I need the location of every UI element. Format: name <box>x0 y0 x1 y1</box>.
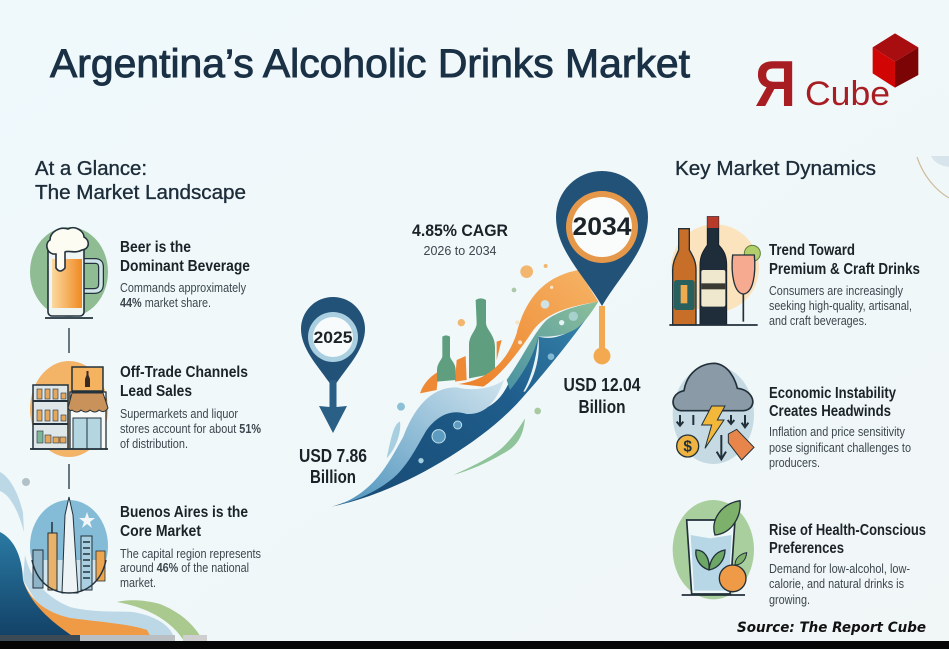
text: off-trade <box>120 364 261 451</box>
title: Argentina’s Alcoholic Drinks Market <box>50 42 690 86</box>
text: off-trade: of distribution. <box>120 437 188 451</box>
pin: 2034: 2034 <box>572 213 632 241</box>
text: off-trade: Off-Trade Channels <box>120 364 248 381</box>
text: buenos aires: Core Market <box>120 523 202 540</box>
text: buenos aires: market. <box>120 576 156 590</box>
icon: beer mug <box>30 227 108 318</box>
dark navy stream <box>332 302 598 507</box>
white highlight <box>523 337 539 392</box>
logo text <box>755 47 890 120</box>
text: off-trade: stores account for about 51% <box>120 422 261 436</box>
text: cagr: 4.85% CAGR <box>412 221 508 240</box>
label: usd 7.86 billion: USD 7.86 <box>299 446 367 466</box>
logo: RCube <box>755 33 918 120</box>
text: buenos aires: around 46% of the national <box>120 561 249 575</box>
pin: 2034 <box>556 171 648 364</box>
decorative arc top right <box>917 156 949 198</box>
text: economic: pose significant challenges to <box>769 441 911 455</box>
text: buenos aires: Buenos Aires is the <box>120 504 248 521</box>
text: health: calorie, and natural drinks is <box>769 577 904 591</box>
text: off-trade: Supermarkets and liquor <box>120 407 238 421</box>
pin: 2025: 2025 <box>314 328 352 347</box>
text: economic <box>769 385 911 470</box>
text: premium: seeking high-quality, artisanal, <box>769 299 912 313</box>
text: premium <box>769 242 920 328</box>
text: cagr <box>412 221 508 258</box>
text: health: growing. <box>769 593 810 607</box>
connector: beer to store <box>68 328 70 353</box>
text: health: Preferences <box>769 540 844 557</box>
panel: at a glance <box>22 158 261 593</box>
heading: at a glance: The Market Landscape <box>35 182 246 204</box>
bottom black bar <box>0 641 949 649</box>
logo cube <box>873 33 918 88</box>
icon: city skyline <box>30 497 108 593</box>
icon: storm with price drops: $ <box>683 439 692 456</box>
green leaf swoosh <box>453 418 525 475</box>
label: usd 12.04 billion <box>564 375 640 417</box>
icon: green bottles <box>437 298 495 382</box>
logo text: Cube <box>805 75 890 113</box>
text: beer: Beer is the <box>120 239 191 256</box>
text: health: Demand for low-alcohol, low- <box>769 562 910 576</box>
logo text: Я <box>755 47 796 120</box>
label: usd 12.04 billion: Billion <box>578 397 626 417</box>
text: buenos aires: The capital region represents <box>120 547 261 561</box>
icon: storm with price drops <box>673 363 754 464</box>
text: economic: producers. <box>769 456 820 470</box>
text: premium: Consumers are increasingly <box>769 284 904 298</box>
text: premium: Premium & Craft Drinks <box>769 261 920 278</box>
label: usd 12.04 billion: USD 12.04 <box>564 375 640 395</box>
text: beer: Dominant Beverage <box>120 258 250 275</box>
light blue wave <box>340 380 504 504</box>
label: usd 7.86 billion: Billion <box>310 467 356 487</box>
text: economic: Inflation and price sensitivity <box>769 425 906 439</box>
text: buenos aires <box>120 504 261 590</box>
text: beer: 44% market share. <box>120 296 211 310</box>
text: premium: Trend Toward <box>769 242 855 259</box>
text: off-trade: Lead Sales <box>120 383 192 400</box>
heading: at a glance: At a Glance: <box>35 158 147 180</box>
decorative dot <box>22 478 30 486</box>
icon: bottles and glass <box>669 217 760 325</box>
text: beer: Commands approximately <box>120 281 247 295</box>
orange stream <box>458 270 598 387</box>
text: economic: Economic Instability <box>769 385 896 402</box>
source credit: Source: The Report Cube <box>737 620 926 636</box>
connector: store to city <box>68 464 70 489</box>
panel: key market dynamics <box>669 158 926 607</box>
text: premium: and craft beverages. <box>769 314 867 328</box>
decorative waves bottom left <box>0 472 207 641</box>
text: economic: Creates Headwinds <box>769 403 891 420</box>
label: usd 7.86 billion <box>299 446 367 487</box>
bubbles <box>387 264 578 463</box>
text: cagr: 2026 to 2034 <box>424 243 496 258</box>
heading: at a glance <box>35 158 246 204</box>
chart: growth swoosh <box>332 264 598 507</box>
icon: health drink <box>673 500 754 599</box>
orange back shapes <box>420 340 502 393</box>
text: beer <box>120 239 250 310</box>
pin: 2025 <box>301 297 365 433</box>
green stream <box>507 302 598 390</box>
heading: key market dynamics: Key Market Dynamics <box>675 158 876 180</box>
icon: store <box>30 361 108 457</box>
text: health <box>769 522 926 607</box>
